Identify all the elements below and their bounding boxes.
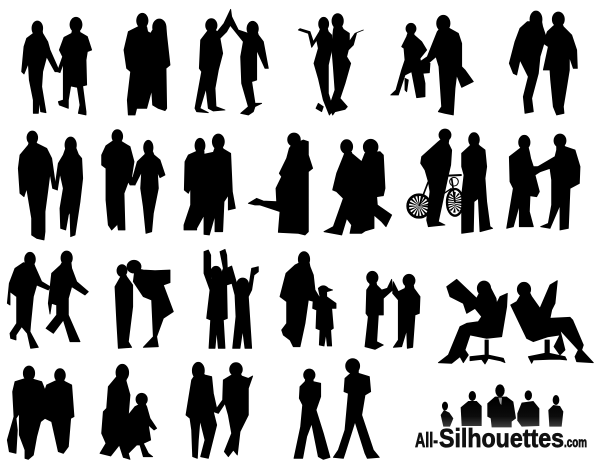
- two women walking: [7, 251, 88, 348]
- row 2 left: silhouette couples: [18, 130, 313, 240]
- two men with bicycle: [408, 129, 493, 233]
- mother walking with child: [100, 364, 157, 459]
- logo text: Silhouettes: [439, 423, 564, 453]
- woman and man with coat: [391, 15, 473, 115]
- couple walking hand in hand: [18, 131, 83, 240]
- mother: [280, 252, 320, 347]
- row 4 right: silhouettes: [294, 359, 379, 459]
- couple striding: [324, 139, 392, 235]
- woman reading in office chair: [438, 279, 507, 364]
- couple embracing: [124, 13, 170, 115]
- row 1 right: silhouette couples: [298, 11, 577, 115]
- row 4 left: silhouettes: [7, 362, 253, 459]
- row 3 right: silhouettes: [313, 271, 593, 364]
- children with raised hands: [204, 249, 258, 348]
- logo text: .com: [564, 434, 587, 450]
- logo: all-silhouettes.com: [415, 384, 587, 453]
- couple high five: [195, 9, 268, 115]
- two women walking: [509, 11, 577, 115]
- two people shaking hands: [507, 134, 580, 230]
- row 3 left: silhouettes: [7, 249, 320, 348]
- older couple with bag: [7, 366, 74, 459]
- woman kissing child: [115, 260, 173, 348]
- standing couple, arms crossed: [294, 359, 379, 459]
- two women holding hands: [186, 362, 253, 458]
- two boys high five: [365, 271, 420, 349]
- couple with handbag: [102, 130, 165, 233]
- couple side by side: [184, 134, 235, 235]
- logo text: All-: [415, 430, 438, 452]
- logo businessmen icon: [441, 384, 563, 427]
- two posing women: [298, 14, 363, 115]
- man reading in reclining chair: [511, 281, 593, 363]
- child in cap: [313, 286, 336, 346]
- couple holding hands: [22, 17, 92, 115]
- row 1: silhouette couples: [22, 9, 268, 115]
- row 2 right: silhouette couples: [324, 129, 580, 235]
- couple hugging, leg kicked back: [248, 133, 313, 235]
